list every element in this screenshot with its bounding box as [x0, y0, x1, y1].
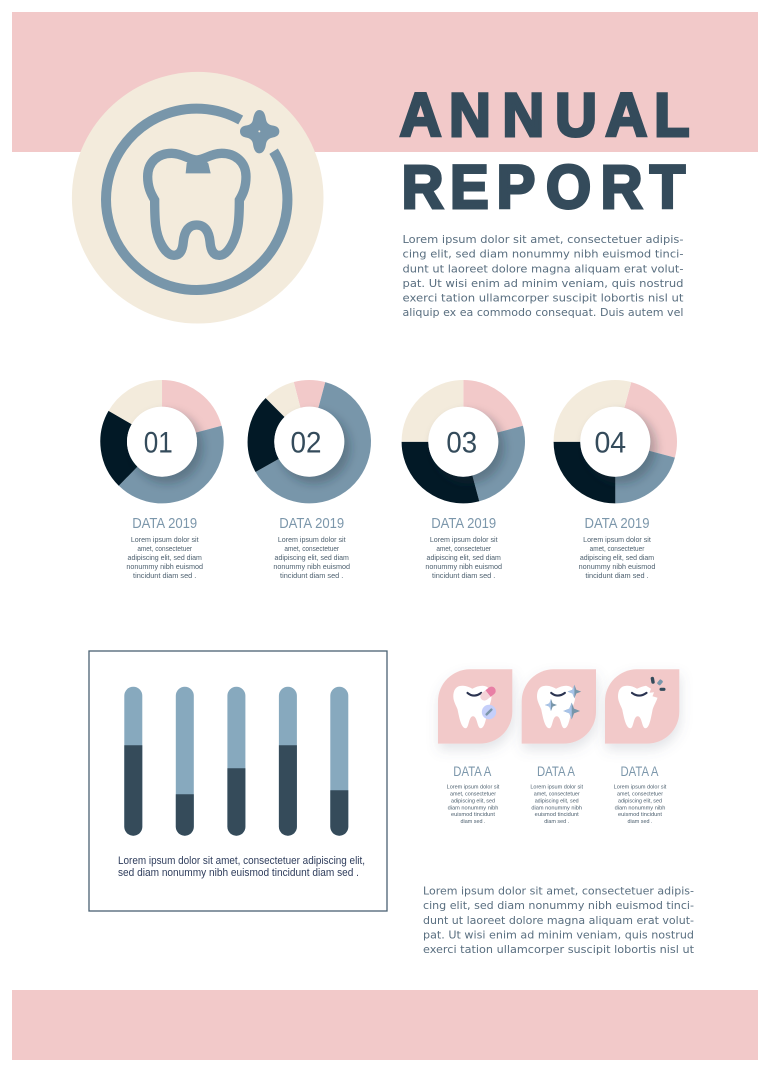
description: nonummy nibh euismod: [126, 562, 203, 571]
description: Lorem ipsum dolor sit: [131, 535, 199, 544]
donut chart 04: [556, 382, 675, 501]
intro paragraph: dunt ut laoreet dolore magna aliquam erat volut-: [402, 262, 684, 275]
closing paragraph: pat. Ut wisi enim ad minim veniam, quis nostrud: [423, 928, 694, 942]
label: DATA 2019: [584, 515, 650, 532]
chart caption: Lorem ipsum dolor sit amet, consectetuer adipiscing elit,: [118, 855, 365, 867]
description: euismod tincidunt: [618, 812, 662, 818]
number 03: 03: [446, 426, 477, 460]
description: [614, 785, 667, 825]
icon card: tooth with pill: [438, 669, 512, 744]
chart caption: [118, 855, 365, 879]
icon card: chipped tooth: [605, 669, 679, 744]
description: Lorem ipsum dolor sit: [530, 785, 583, 791]
description: adipiscing elit, sed: [618, 798, 662, 804]
intro paragraph: exerci tation ullamcorper suscipit lobortis nisl ut: [402, 291, 684, 304]
description: diam nonummy nibh: [615, 805, 665, 811]
intro paragraph: pat. Ut wisi enim ad minim veniam, quis nostrud: [402, 277, 684, 290]
description: amet, consectetuer: [617, 792, 663, 798]
description: Lorem ipsum dolor sit: [278, 535, 346, 544]
icon: tooth outline: [148, 153, 246, 255]
description: [126, 535, 203, 580]
description: diam sed .: [460, 819, 486, 825]
description: tincidunt diam sed .: [432, 571, 495, 580]
closing paragraph: [423, 884, 694, 956]
hero tooth emblem: [72, 72, 324, 324]
description: tincidunt diam sed .: [280, 571, 343, 580]
donut chart 03: [404, 382, 523, 501]
label: DATA A: [453, 763, 492, 779]
description: adipiscing elit, sed diam: [427, 553, 501, 562]
closing paragraph: dunt ut laoreet dolore magna aliquam erat volut-: [423, 914, 694, 927]
description: amet, consectetuer: [436, 544, 492, 553]
icon card: tooth with sparkles: [522, 669, 596, 744]
label: DATA 2019: [132, 515, 197, 532]
panel: tooth card A3: [605, 669, 679, 825]
description: amet, consectetuer: [534, 792, 580, 798]
panel: data 01: [94, 373, 230, 580]
description: diam sed .: [544, 819, 570, 825]
description: diam nonummy nibh: [448, 805, 498, 811]
intro paragraph: Lorem ipsum dolor sit amet, consectetuer adipis-: [402, 233, 684, 246]
description: amet, consectetuer: [590, 544, 645, 553]
number 02: 02: [290, 426, 322, 460]
emblem circle: [72, 72, 324, 324]
panel: data 04: [556, 382, 675, 580]
number 04: 04: [594, 426, 626, 460]
closing paragraph: exerci tation ullamcorper suscipit lobortis nisl ut: [423, 943, 694, 956]
description: adipiscing elit, sed diam: [128, 553, 202, 562]
label: DATA 2019: [279, 515, 344, 532]
number 01: 01: [144, 426, 173, 460]
description: amet, consectetuer: [284, 544, 340, 553]
title: [400, 80, 689, 221]
donut chart 01: [94, 373, 230, 510]
description: [579, 535, 655, 580]
header band: [12, 12, 758, 152]
description: [425, 535, 502, 580]
description: amet, consectetuer: [137, 544, 193, 553]
label: DATA 2019: [431, 515, 496, 532]
description: diam sed .: [628, 819, 653, 825]
description: [530, 785, 583, 825]
closing paragraph: Lorem ipsum dolor sit amet, consectetuer adipis-: [423, 884, 694, 898]
title: ANNUAL: [400, 80, 689, 149]
description: [447, 785, 500, 825]
description: adipiscing elit, sed: [535, 798, 579, 804]
label: DATA A: [620, 763, 659, 779]
description: euismod tincidunt: [451, 812, 495, 818]
panel: bar chart box: [89, 651, 387, 911]
description: adipiscing elit, sed diam: [275, 553, 349, 562]
description: adipiscing elit, sed: [451, 798, 495, 804]
icon: sparkle: [240, 110, 279, 153]
intro paragraph: [402, 233, 684, 319]
description: nonummy nibh euismod: [425, 562, 502, 571]
title: REPORT: [402, 152, 685, 221]
description: diam nonummy nibh: [531, 805, 582, 811]
description: amet, consectetuer: [450, 792, 496, 798]
description: Lorem ipsum dolor sit: [430, 535, 498, 544]
description: euismod tincidunt: [535, 812, 579, 818]
description: Lorem ipsum dolor sit: [447, 785, 500, 791]
label: DATA A: [537, 763, 576, 779]
description: nonummy nibh euismod: [273, 562, 350, 571]
description: tincidunt diam sed .: [133, 571, 196, 580]
bar chart: [124, 687, 348, 836]
donut chart 02: [241, 373, 378, 510]
description: adipiscing elit, sed diam: [580, 553, 654, 562]
intro paragraph: aliquip ex ea commodo consequat. Duis autem vel: [402, 306, 684, 319]
description: [273, 535, 350, 580]
panel: tooth card A1: [438, 669, 512, 825]
description: tincidunt diam sed .: [585, 571, 649, 580]
chart caption: sed diam nonummy nibh euismod tincidunt diam sed .: [118, 867, 359, 879]
intro paragraph: cing elit, sed diam nonummy nibh euismod tinci-: [402, 248, 684, 261]
panel: data 02: [241, 373, 378, 580]
panel: data 03: [404, 382, 523, 580]
panel: tooth card A2: [522, 669, 596, 825]
description: nonummy nibh euismod: [579, 562, 655, 571]
description: Lorem ipsum dolor sit: [614, 785, 667, 791]
description: Lorem ipsum dolor sit: [583, 535, 651, 544]
footer band: [12, 990, 758, 1060]
emblem ring: [106, 109, 287, 290]
closing paragraph: cing elit, sed diam nonummy nibh euismod tinci-: [423, 899, 694, 912]
